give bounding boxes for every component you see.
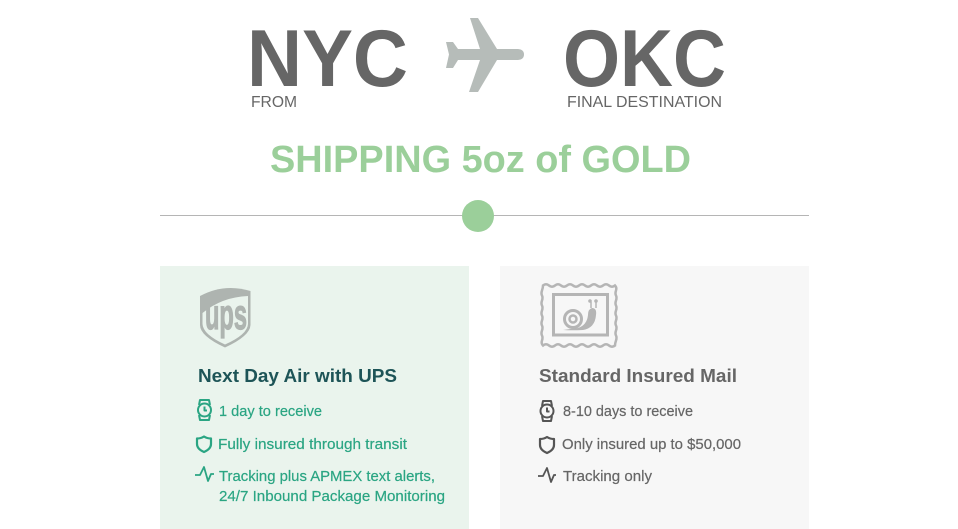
icon: shield — [540, 437, 554, 453]
icon: snail stamp — [542, 284, 616, 347]
item: delivery time: 8-10 days to receive — [563, 403, 693, 420]
heading: Standard Insured Mail — [539, 366, 737, 386]
item: insurance: Only insured up to $50,000 — [562, 436, 741, 453]
item: tracking: 24/7 Inbound Package Monitoring — [219, 488, 445, 505]
icon: UPS shield — [200, 288, 250, 348]
title: SHIPPING 5oz of GOLD — [270, 139, 691, 181]
item: tracking — [195, 467, 445, 505]
divider with dot — [160, 200, 809, 232]
icon: pulse — [195, 467, 214, 481]
origin: NYC: NYC — [247, 14, 408, 104]
icon: pulse — [538, 468, 556, 482]
panel: UPS — [160, 266, 469, 529]
panel: standard mail — [500, 266, 809, 529]
icon: UPS shield: ups — [205, 291, 247, 339]
item: tracking: Tracking plus APMEX text alerts, — [219, 468, 435, 485]
icon: shield — [197, 436, 211, 452]
icon: airplane — [446, 18, 524, 92]
destination: OKC: OKC — [563, 14, 726, 104]
item: insurance: Fully insured through transit — [218, 436, 408, 453]
destination: OKC: FINAL DESTINATION — [567, 94, 722, 111]
origin: NYC: FROM — [251, 94, 297, 111]
heading: Next Day Air with UPS — [198, 366, 397, 386]
item: delivery time: 1 day to receive — [219, 403, 322, 420]
item: delivery time — [198, 400, 322, 420]
item: tracking: Tracking only — [563, 468, 652, 485]
icon: watch — [198, 400, 211, 420]
icon: watch — [540, 401, 554, 421]
